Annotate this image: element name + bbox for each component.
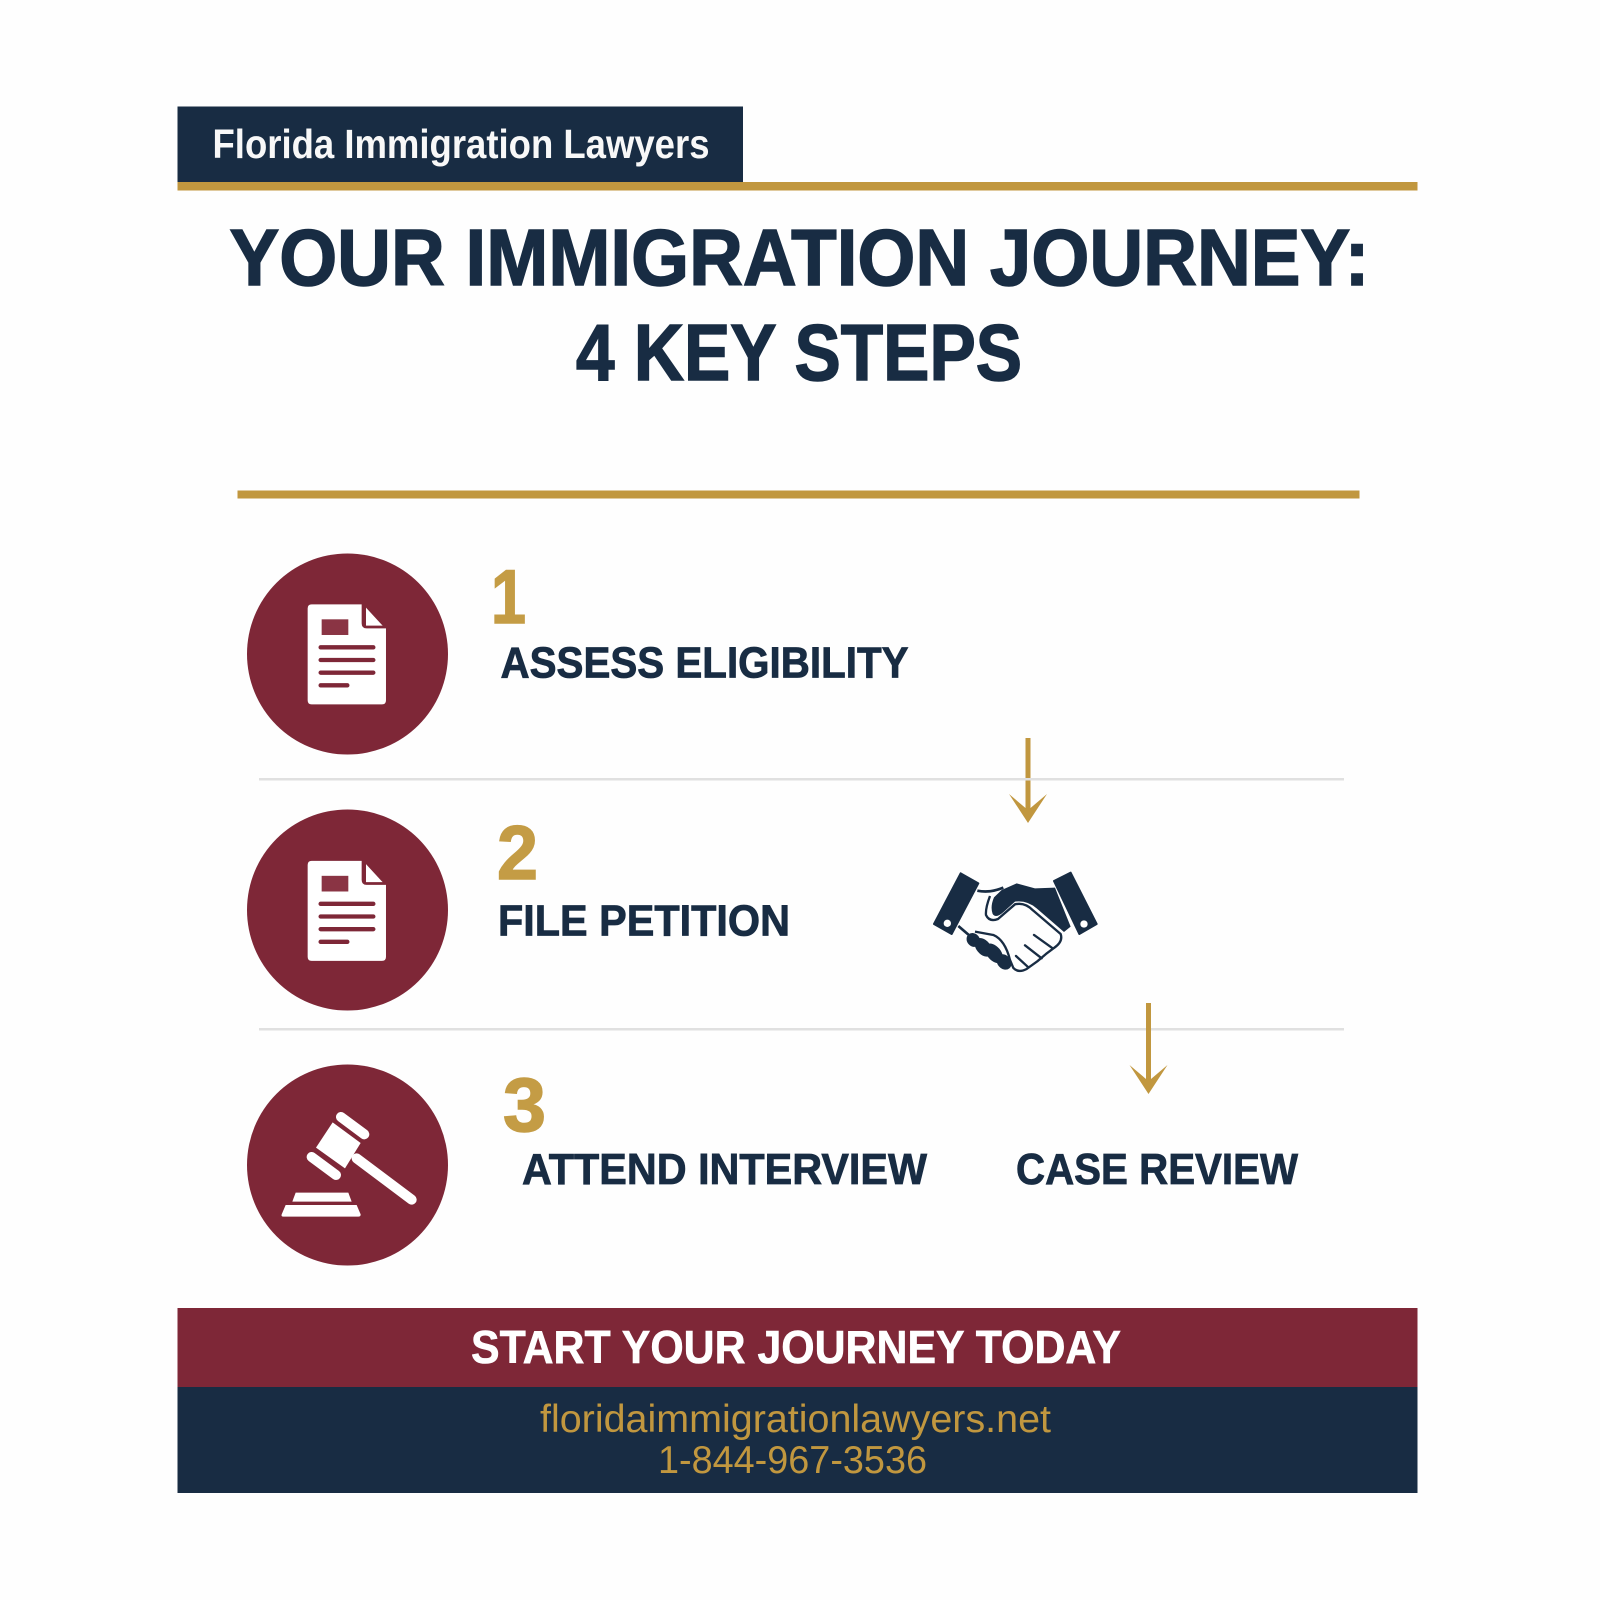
website: floridaimmigrationlawyers.net	[540, 1398, 1051, 1441]
label: case review: CASE REVIEW	[1016, 1145, 1298, 1194]
phone: 1-844-967-3536	[658, 1439, 927, 1482]
step label: FILE PETITION	[498, 896, 790, 946]
arrow: down to case review	[1130, 1003, 1168, 1094]
step 1: assess eligibility	[247, 554, 908, 754]
arrow: down to handshake	[1009, 738, 1047, 823]
icon: document in maroon circle	[247, 810, 448, 1010]
icon: document in maroon circle	[247, 554, 448, 754]
title	[230, 213, 1370, 397]
title: YOUR IMMIGRATION JOURNEY:	[230, 213, 1370, 302]
step 3: attend interview	[247, 1063, 927, 1266]
header: firm name tab	[178, 106, 743, 182]
call to action banner	[178, 1308, 1418, 1387]
step number 3: 3	[503, 1063, 546, 1148]
icon: handshake	[934, 873, 1097, 973]
step 2: file petition	[247, 810, 790, 1010]
step number 2: 2	[497, 811, 538, 896]
step number 1: 1	[491, 555, 526, 640]
header: firm name tab: Florida Immigration Lawyers	[212, 121, 710, 167]
contact panel	[178, 1387, 1418, 1493]
step label: ASSESS ELIGIBILITY	[500, 638, 908, 688]
title: 4 KEY STEPS	[576, 308, 1022, 397]
step label: ATTEND INTERVIEW	[522, 1145, 927, 1194]
icon: gavel in maroon circle	[247, 1064, 448, 1266]
call to action banner: START YOUR JOURNEY TODAY	[471, 1321, 1121, 1373]
